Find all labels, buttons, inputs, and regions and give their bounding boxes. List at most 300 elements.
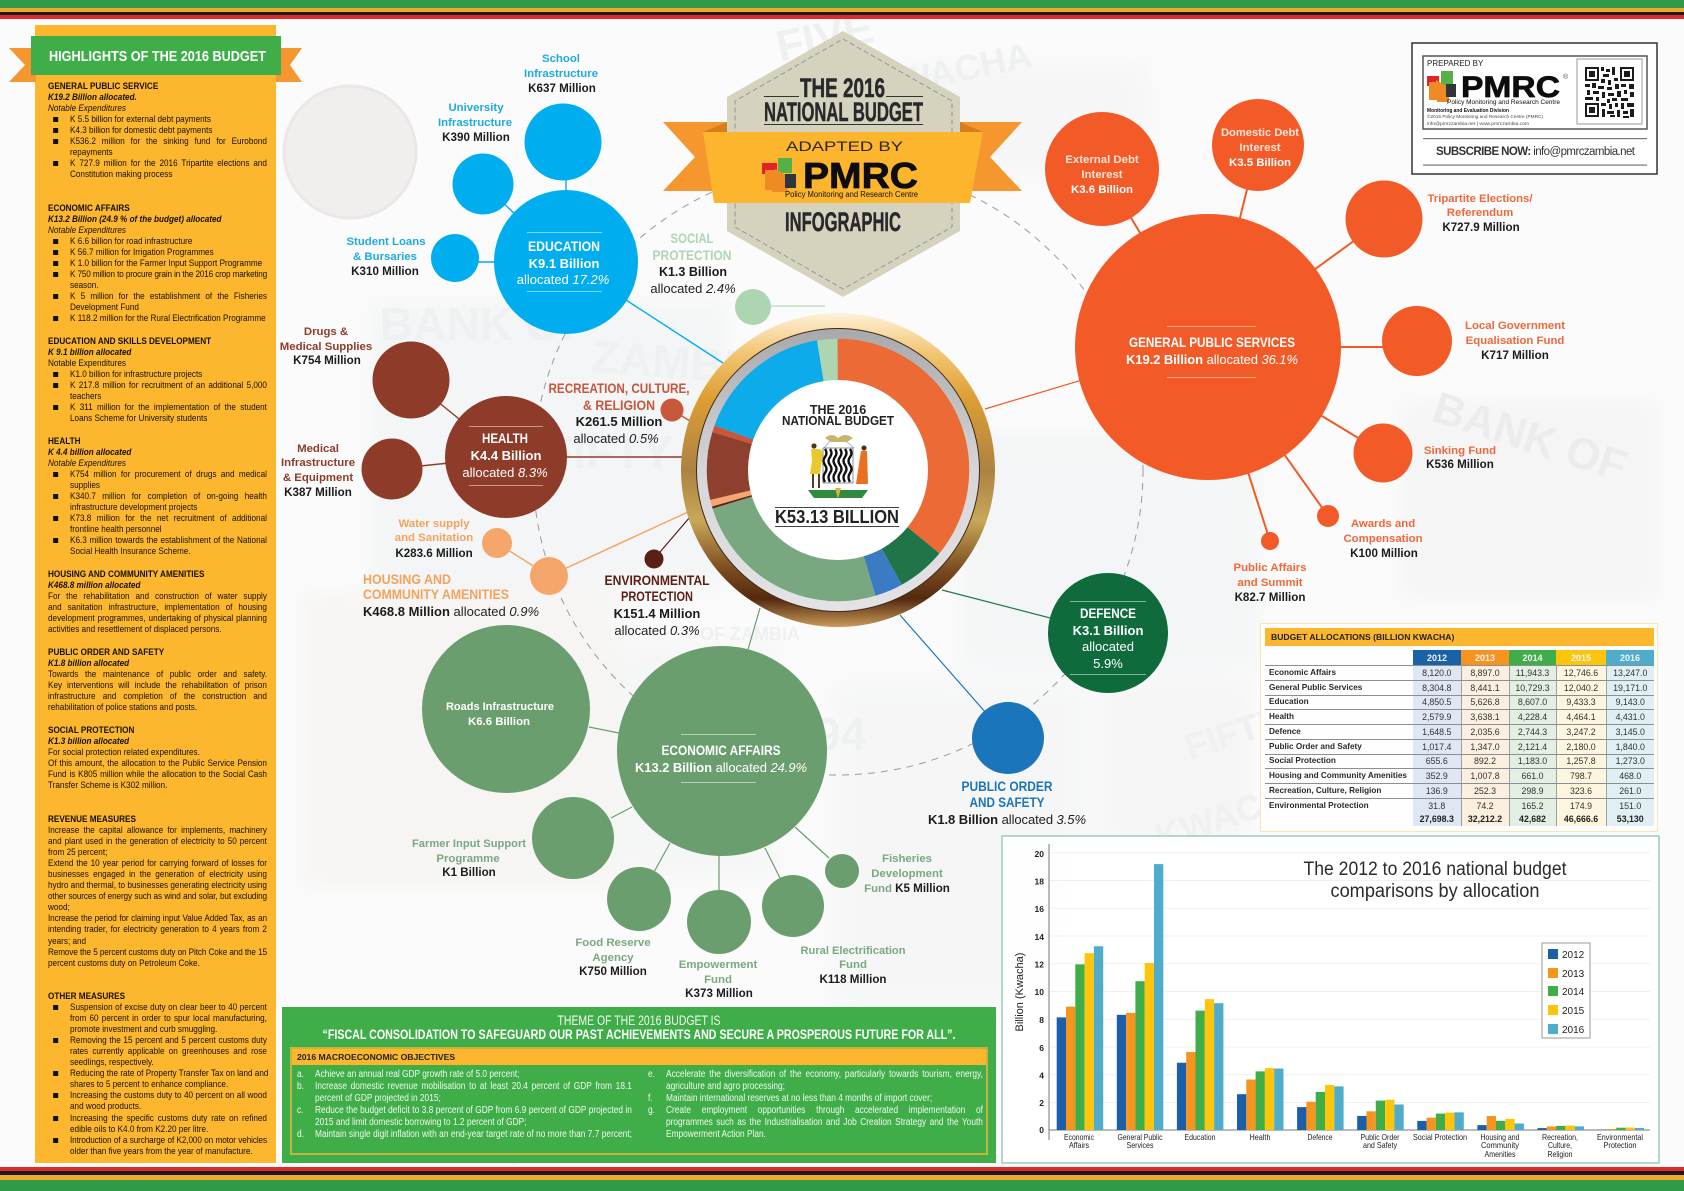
panel: environmental protection: PROTECTION xyxy=(621,589,693,604)
section: other measures xyxy=(48,990,268,1157)
bars: social protection xyxy=(1417,1112,1464,1130)
table grid: 1,183.0 xyxy=(1518,756,1547,766)
panel: defence: K3.1 Billion xyxy=(1073,623,1143,638)
table grid: Public Order and Safety xyxy=(1269,742,1362,751)
x axis labels: and Safety xyxy=(1363,1140,1398,1150)
x axis labels: Culture, xyxy=(1548,1140,1572,1150)
section: education and skills development: Notable Expenditures xyxy=(48,358,126,369)
table heading: BUDGET ALLOCATIONS (BILLION KWACHA) xyxy=(1271,632,1454,642)
section: other measures: OTHER MEASURES xyxy=(48,990,125,1002)
section: other measures: Increasing the specific customs duty rate on refined xyxy=(70,1113,267,1124)
section: revenue measures: Remove the 5 percent customs duty on Pitch Coke and the 15 xyxy=(48,947,267,958)
panel: recreation, culture and religion: & RELIGION xyxy=(583,398,655,413)
background: faint banknote watermark: OF ZAMBIA xyxy=(700,624,800,644)
background: faint banknote watermark: ZAMBIA xyxy=(589,330,771,394)
y axis labels: 8 xyxy=(1039,1015,1044,1025)
table grid: 3,145.0 xyxy=(1616,727,1645,737)
bubble: local government equalisation fund xyxy=(1382,306,1565,376)
section: health: K 4.4 billion allocated xyxy=(48,447,131,458)
table grid: 1,017.4 xyxy=(1422,742,1451,752)
section: social protection: K1.3 billion allocated xyxy=(48,736,129,747)
section: revenue measures: hydro and thermal, to businesses generating electricity using xyxy=(48,880,267,891)
section: housing and community amenities xyxy=(48,568,267,635)
gridlines xyxy=(1050,853,1650,1102)
bubble: external debt interest: External Debt xyxy=(1065,154,1139,166)
section: economic affairs: Notable Expenditures xyxy=(48,225,126,236)
table grid: 2016 xyxy=(1620,652,1640,662)
logo: PMRC: Policy Monitoring and Research Centre xyxy=(785,189,918,199)
bubble: local government equalisation fund: Local Government xyxy=(1465,320,1565,332)
main bubble: education xyxy=(494,190,638,334)
bubble: school infrastructure xyxy=(524,53,602,180)
objectives right column: e. xyxy=(648,1069,655,1080)
y axis labels: 0 xyxy=(1039,1125,1044,1135)
icon: QR code xyxy=(1577,59,1642,124)
bubble: domestic debt interest xyxy=(1212,99,1304,191)
section: other measures: shares to 5 percent to enhance compliance. xyxy=(70,1079,228,1090)
table grid: 27,698.3 xyxy=(1420,814,1454,824)
section: other measures: Suspension of excise duty on clear beer to 40 percent xyxy=(70,1002,267,1013)
section: revenue measures: Increase the capital allowance for implements, machinery xyxy=(48,825,267,836)
bubble: university infrastructure: University xyxy=(448,102,504,114)
y axis labels: 10 xyxy=(1035,987,1044,997)
section: revenue measures: intending trader, for electricity generation to 4 years from 2 xyxy=(48,924,267,935)
bubble: empowerment fund: Fund xyxy=(704,974,732,986)
x axis labels: General Public xyxy=(1118,1132,1162,1142)
section: education and skills development: K 9.1 billion allocated xyxy=(48,347,131,358)
center disc xyxy=(748,380,928,560)
x axis labels: Affairs xyxy=(1069,1140,1089,1150)
section: social protection xyxy=(48,724,267,791)
section: health: K73.8 million for the net recruitment of additional xyxy=(70,513,267,524)
panel: highlights of the 2016 budget xyxy=(9,25,302,1163)
bubble: public affairs and summit: K82.7 Million xyxy=(1235,591,1305,604)
main bubble: health: K4.4 Billion xyxy=(471,448,541,463)
panel: recreation, culture and religion: K261.5 Million xyxy=(576,414,662,429)
table grid: 1,648.5 xyxy=(1422,727,1451,737)
bubble: housing: COMMUNITY AMENITIES xyxy=(363,587,509,602)
objectives left column: Increase domestic revenue mobilisation to at least 20.4 percent of GDP from 18.1 xyxy=(315,1081,632,1092)
section: housing and community amenities: development programmes, undertaking of physical planning xyxy=(48,613,267,624)
bubble: sinking fund: Sinking Fund xyxy=(1424,445,1496,457)
bubble: farmer input support xyxy=(412,797,614,879)
x axis labels: Housing and xyxy=(1480,1132,1520,1142)
table grid: 2,579.9 xyxy=(1422,712,1451,722)
x axis labels xyxy=(1064,1132,1643,1159)
label: PROTECTION xyxy=(652,248,732,263)
section: other measures: older than five years from the year of manufacture. xyxy=(70,1146,253,1157)
bubble: awards and compensation: Awards and xyxy=(1351,518,1415,530)
badge title text: INFOGRAPHIC xyxy=(785,207,901,237)
objectives right column: Accelerate the diversification of the economy, particularly towards tourism, energy, xyxy=(666,1069,983,1080)
panel: public order and safety: K1.8 Billion allocated 3.5% xyxy=(928,812,1086,827)
bubble: medical infrastructure: & Equipment xyxy=(283,472,353,484)
section: general public service: Constitution making process xyxy=(70,169,172,180)
table grid: 2,744.3 xyxy=(1518,727,1547,737)
table grid: 1,273.0 xyxy=(1616,756,1645,766)
legend: 2015 xyxy=(1562,1006,1585,1017)
table grid: Recreation, Culture, Religion xyxy=(1269,786,1381,795)
section: other measures: seedlings, respectively. xyxy=(70,1057,154,1068)
bubble: drugs and medical supplies: Drugs & xyxy=(304,326,348,338)
main bubble: health xyxy=(445,396,567,518)
panel: public order and safety: PUBLIC ORDER xyxy=(962,779,1053,794)
bubble: drugs and medical supplies: Medical Supplies xyxy=(280,341,372,353)
icon: Zambia coat of arms xyxy=(808,435,868,499)
section: revenue measures: businesses engaged in the generation of electricity using xyxy=(48,869,267,880)
section: housing and community amenities: K468.8 million allocated xyxy=(48,580,140,591)
table grid: 1,007.8 xyxy=(1470,771,1500,781)
connectors xyxy=(392,380,684,469)
section: economic affairs xyxy=(48,202,267,324)
section: health: Social Health Insurance Scheme. xyxy=(70,546,191,557)
logo: PMRC small: info@pmrczambia.net | www.pmrczambia.com xyxy=(1427,121,1529,126)
objectives left column: Reduce the budget deficit to 3.8 percent of GDP from 6.9 percent of GDP projected in xyxy=(315,1105,632,1116)
central donut chart xyxy=(681,313,995,627)
background: faint banknote watermark: BANK OF xyxy=(380,298,590,350)
panel: recreation, culture and religion: allocated 0.5% xyxy=(573,431,659,446)
bubble: university infrastructure: K390 Million xyxy=(442,131,510,144)
main bubble: general public services: GENERAL PUBLIC SERVICES xyxy=(1129,334,1295,350)
bubble: food reserve agency: Food Reserve xyxy=(575,937,651,949)
bubble: farmer input support: Programme xyxy=(436,853,500,865)
objectives right column: agriculture and agro processing; xyxy=(666,1081,785,1092)
table grid: 11,943.3 xyxy=(1516,668,1549,678)
section: health: frontline health personnel xyxy=(70,524,162,535)
section: general public service: Notable Expenditures xyxy=(48,103,126,114)
bubble: local government equalisation fund: Equalisation Fund xyxy=(1466,335,1564,347)
silver ring xyxy=(697,329,979,611)
background: faint banknote watermark: FIVE xyxy=(772,4,878,72)
table grid: 892.2 xyxy=(1474,756,1496,766)
y axis labels: 6 xyxy=(1039,1043,1044,1053)
section: other measures: Removing the 15 percent and 5 percent customs duty xyxy=(70,1035,267,1046)
y axis labels: 16 xyxy=(1035,904,1044,914)
logo: PMRC small: Policy Monitoring and Research Centre xyxy=(1447,99,1560,106)
section: health xyxy=(48,436,267,557)
bubble: food reserve agency xyxy=(575,867,671,978)
x axis labels: Protection xyxy=(1604,1140,1637,1150)
x axis labels: Recreation, xyxy=(1542,1132,1578,1142)
table grid xyxy=(1265,650,1654,826)
objectives right column: programmes such as the Industrialisation and Job Creation Strategy and the Youth xyxy=(666,1117,983,1128)
y axis labels: 14 xyxy=(1035,932,1044,942)
bubble: rural electrification fund: Fund xyxy=(839,959,867,971)
panel: education xyxy=(346,53,723,363)
logo: PMRC small: PMRC xyxy=(1461,71,1560,104)
bubble: awards and compensation: Compensation xyxy=(1343,533,1423,545)
bubble: school infrastructure: Infrastructure xyxy=(524,68,598,80)
section: other measures: and wood products. xyxy=(70,1101,141,1112)
section: economic affairs: K 118.2 million for the Rural Electrification Programme xyxy=(70,313,266,324)
section: other measures: promote investment and curb smuggling. xyxy=(70,1024,217,1035)
logo: PMRC small xyxy=(1427,71,1569,126)
table grid: 655.6 xyxy=(1426,756,1448,766)
bubble: sinking fund: K536 Million xyxy=(1426,458,1494,471)
section: public order and safety: infrastructure and completion of the construction and xyxy=(48,691,267,702)
x axis labels: Religion xyxy=(1548,1149,1573,1159)
background: faint banknote watermark: KWACHA xyxy=(1150,769,1317,858)
section: revenue measures: and plant used in the generation of electricity to 50 percent xyxy=(48,836,267,847)
bubble: student loans: K310 Million xyxy=(351,265,419,278)
bubble: farmer input support: Farmer Input Support xyxy=(412,838,526,850)
x axis labels: Defence xyxy=(1308,1132,1333,1142)
table grid: 53,130 xyxy=(1617,814,1644,824)
subscribe line: SUBSCRIBE NOW: info@pmrczambia.net xyxy=(1436,146,1636,158)
section: public order and safety: Towards the maintenance of public order and safety. xyxy=(48,669,267,680)
bubble: housing: HOUSING AND xyxy=(363,572,451,587)
chart title: comparisons by allocation xyxy=(1330,881,1540,902)
bottom flag stripes xyxy=(0,1167,1684,1191)
table grid: 32,212.2 xyxy=(1468,814,1502,824)
background: faint banknote watermark: KWACHA xyxy=(868,34,1035,108)
panel: general public services xyxy=(985,99,1565,604)
badge title text: THE 2016 xyxy=(800,73,885,103)
bubble: school infrastructure: K637 Million xyxy=(528,82,596,95)
bubble: public affairs and summit: Public Affairs xyxy=(1234,562,1306,574)
section: revenue measures: wood; xyxy=(48,902,70,913)
bubble: empowerment fund: K373 Million xyxy=(685,987,753,1000)
bubble: empowerment fund xyxy=(679,890,757,1000)
label: SOCIAL xyxy=(670,231,714,246)
legend xyxy=(1542,943,1590,1038)
table grid: 661.0 xyxy=(1521,771,1544,781)
section: economic affairs: K 5 million for the establishment of the Fisheries xyxy=(70,291,267,302)
theme heading: THEME OF THE 2016 BUDGET IS xyxy=(558,1013,720,1028)
table grid: 3,247.2 xyxy=(1566,727,1596,737)
table grid: 151.0 xyxy=(1619,801,1641,811)
panel: housing and community amenities xyxy=(363,512,688,619)
section: general public service: K 5.5 billion for external debt payments xyxy=(70,114,211,125)
bubble: farmer input support: K1 Billion xyxy=(442,866,496,879)
heading ribbon: HIGHLIGHTS OF THE 2016 BUDGET xyxy=(49,48,266,65)
x axis labels: Education xyxy=(1184,1132,1216,1142)
bars: public order and safety xyxy=(1357,1100,1404,1130)
hexagon xyxy=(727,31,960,297)
label xyxy=(650,231,736,296)
section: general public service: K536.2 million for the sinking fund for Eurobond xyxy=(70,136,267,147)
objectives right column: Empowerment Action Plan. xyxy=(666,1129,766,1140)
logo: PMRC: PMRC xyxy=(803,155,918,196)
section: education and skills development xyxy=(48,336,267,424)
bubble: roads infrastructure: Roads Infrastructure xyxy=(446,701,554,713)
adapted by: ADAPTED BY xyxy=(786,139,903,154)
main bubble: economic affairs: K13.2 Billion allocated 24.9% xyxy=(635,760,807,775)
bubble: roads infrastructure: K6.6 Billion xyxy=(468,716,530,728)
section: revenue measures: REVENUE MEASURES xyxy=(48,814,136,824)
main bubble: education: K9.1 Billion xyxy=(529,256,599,271)
connectors xyxy=(985,380,1082,409)
table grid: 1,347.0 xyxy=(1470,742,1500,752)
section: economic affairs: K 750 million to procure grain in the 2016 crop marketing xyxy=(70,269,267,280)
table grid: 261.0 xyxy=(1619,786,1641,796)
bubble: water supply: and Sanitation xyxy=(395,532,473,544)
objectives right column: Create employment opportunities through accelerated implementation of xyxy=(666,1105,983,1116)
table grid: 9,433.3 xyxy=(1566,697,1596,707)
section: social protection: Transfer Scheme is K302 million. xyxy=(48,780,167,791)
ribbon xyxy=(663,122,1022,203)
panel: defence: allocated xyxy=(1082,639,1134,654)
background: faint banknote watermark: FIFTY xyxy=(545,426,673,478)
x axis labels: Public Order xyxy=(1360,1132,1400,1142)
table grid: 3,638.1 xyxy=(1470,712,1500,722)
bubble xyxy=(735,289,771,325)
bubble: fisheries development fund: Fisheries xyxy=(882,853,932,865)
table grid: 9,143.0 xyxy=(1616,697,1645,707)
table grid: Defence xyxy=(1269,727,1301,736)
legend: 2012 xyxy=(1562,950,1585,961)
table grid: General Public Services xyxy=(1269,683,1362,692)
main bubble: education: allocated 17.2% xyxy=(517,272,609,287)
dashed orbit ring xyxy=(533,165,1143,775)
section: economic affairs: ECONOMIC AFFAIRS xyxy=(48,202,130,214)
main bubble: economic affairs xyxy=(617,646,827,856)
axes xyxy=(1049,844,1650,1140)
x axis labels: Amenities xyxy=(1484,1149,1516,1159)
bubble: student loans xyxy=(346,234,479,282)
bars: general public services xyxy=(1117,864,1163,1130)
bubble: external debt interest xyxy=(1045,112,1159,226)
section: public order and safety: Key interventions will include the rehabilitation of prison xyxy=(48,680,267,691)
connectors xyxy=(589,608,829,890)
table grid: 46,666.6 xyxy=(1564,814,1598,824)
objectives left column xyxy=(297,1069,632,1140)
objectives left column: a. xyxy=(297,1069,304,1080)
section: health: K6.3 million towards the establishment of the National xyxy=(70,535,267,546)
bubble: tripartite elections: Tripartite Elections/ xyxy=(1428,193,1533,205)
objectives left column: d. xyxy=(297,1129,304,1140)
bubble: medical infrastructure: Medical xyxy=(297,443,339,455)
panel: economic affairs xyxy=(412,608,950,1000)
legend: 2016 xyxy=(1562,1025,1585,1036)
table grid: 4,464.1 xyxy=(1566,712,1596,722)
section: social protection: SOCIAL PROTECTION xyxy=(48,724,134,736)
bubble: university infrastructure xyxy=(438,102,514,214)
badge title text xyxy=(764,73,923,237)
section: other measures: Increasing the customs duty to 40 percent on all wood xyxy=(70,1090,267,1101)
section: economic affairs: Development Fund xyxy=(70,302,139,313)
badge title text: NATIONAL BUDGET xyxy=(764,97,923,127)
section: general public service: K 727.9 million for the 2016 Tripartite elections and xyxy=(70,158,267,169)
prepared by label: PREPARED BY xyxy=(1427,59,1484,68)
y axis labels: 4 xyxy=(1039,1070,1044,1080)
panel: defence xyxy=(942,573,1168,693)
section: education and skills development: K 217.8 million for recruitment of an additional 5,000 xyxy=(70,380,267,391)
bubble: rural electrification fund: Rural Electrification xyxy=(800,945,906,957)
bubble: medical infrastructure: Infrastructure xyxy=(281,457,355,469)
section: economic affairs: season. xyxy=(70,280,99,291)
bubble: awards and compensation: K100 Million xyxy=(1350,547,1418,560)
objectives left column: b. xyxy=(297,1081,304,1092)
section: general public service: K4.3 billion for domestic debt payments xyxy=(70,125,212,136)
table grid: 8,304.8 xyxy=(1422,683,1451,693)
table grid: 42,682 xyxy=(1519,814,1546,824)
table grid: 19,171.0 xyxy=(1613,683,1647,693)
bars: housing and community amenities xyxy=(1477,1116,1524,1130)
table grid: 12,040.2 xyxy=(1564,683,1598,693)
section: housing and community amenities: and sanitation infrastructure, implementation of housing xyxy=(48,602,267,613)
bubble: food reserve agency: Agency xyxy=(592,952,634,964)
objectives box xyxy=(290,1047,988,1155)
table grid: 2,180.0 xyxy=(1566,742,1596,752)
bubble: rural electrification fund xyxy=(762,875,906,986)
section: general public service: repayments xyxy=(70,147,113,158)
table grid: 31.8 xyxy=(1428,801,1445,811)
section: social protection: For social protection related expenditures. xyxy=(48,747,200,758)
bars xyxy=(1057,864,1644,1130)
table grid: 4,850.5 xyxy=(1422,697,1451,707)
objectives heading: 2016 MACROECONOMIC OBJECTIVES xyxy=(297,1052,455,1062)
table grid: 12,746.6 xyxy=(1564,668,1598,678)
table grid: Education xyxy=(1269,697,1309,706)
panel: defence: DEFENCE xyxy=(1080,606,1136,621)
main bubble: general public services: K19.2 Billion allocated 36.1% xyxy=(1126,352,1298,367)
section: economic affairs: K 56.7 million for Irrigation Programmes xyxy=(70,247,214,258)
section: health: HEALTH xyxy=(48,436,80,446)
label: K1.3 Billion xyxy=(659,265,727,279)
bubble: roads infrastructure xyxy=(422,625,590,793)
objectives right column: g. xyxy=(648,1105,655,1116)
table grid: 10,729.3 xyxy=(1515,683,1550,693)
table grid: 165.2 xyxy=(1521,801,1544,811)
bubble: housing: K468.8 Million allocated 0.9% xyxy=(363,604,539,619)
connector xyxy=(754,305,825,307)
bubble: drugs and medical supplies xyxy=(280,326,450,418)
table grid: 1,257.8 xyxy=(1566,756,1596,766)
panel: health xyxy=(280,326,684,518)
section: general public service xyxy=(48,80,267,180)
section: public order and safety: PUBLIC ORDER AND SAFETY xyxy=(48,646,164,658)
section: other measures: Reducing the rate of Property Transfer Tax on land and xyxy=(70,1068,268,1079)
x axis labels: Services xyxy=(1126,1140,1154,1150)
bubble: fisheries development fund: Fund K5 Million xyxy=(864,882,950,895)
section: education and skills development: K 311 million for the implementation of the student xyxy=(70,402,267,413)
table grid: Housing and Community Amenities xyxy=(1269,771,1407,780)
bubble: external debt interest: Interest xyxy=(1081,169,1123,181)
section: general public service: K19.2 Billion allocated. xyxy=(48,92,137,103)
legend: 2014 xyxy=(1562,987,1585,998)
main bubble: health: allocated 8.3% xyxy=(462,465,548,480)
section: revenue measures: other sources of energy such as wind and solar, but excluding xyxy=(48,891,267,902)
bubble: public affairs and summit xyxy=(1234,532,1306,604)
chart title xyxy=(1304,859,1567,902)
logo: PMRC small: Monitoring and Evaluation Division xyxy=(1427,108,1509,114)
bubble: rural electrification fund: K118 Million xyxy=(819,973,887,986)
table grid: 2015 xyxy=(1571,652,1591,662)
section: education and skills development: teachers xyxy=(70,391,101,402)
table grid: 352.9 xyxy=(1426,771,1448,781)
table grid: 468.0 xyxy=(1619,771,1641,781)
main bubble: general public services xyxy=(1075,214,1341,480)
section: revenue measures xyxy=(48,814,267,969)
section: public order and safety: rehabilitation of police stations and posts. xyxy=(48,702,197,713)
logo: PMRC xyxy=(762,155,918,199)
section: revenue measures: Extend the 10 year period for carrying forward of losses for xyxy=(48,858,267,869)
section: health: supplies xyxy=(70,480,100,491)
bubble: tripartite elections xyxy=(1346,180,1533,258)
bars: health xyxy=(1237,1068,1284,1130)
panel: defence: 5.9% xyxy=(1093,656,1123,671)
x axis labels: Economic xyxy=(1064,1132,1094,1142)
legend: 2013 xyxy=(1562,969,1585,980)
panel: environmental protection: allocated 0.3% xyxy=(614,623,700,638)
section: other measures: rates currently applicable on greenhouses and rose xyxy=(70,1046,267,1057)
bubble: water supply xyxy=(395,518,512,560)
bubble: external debt interest: K3.6 Billion xyxy=(1071,184,1133,196)
bubble: drugs and medical supplies: K754 Million xyxy=(293,354,361,367)
section: social protection: Of this amount, the allocation to the Public Service Pension xyxy=(48,758,267,769)
x axis labels: Environmental xyxy=(1597,1132,1643,1142)
